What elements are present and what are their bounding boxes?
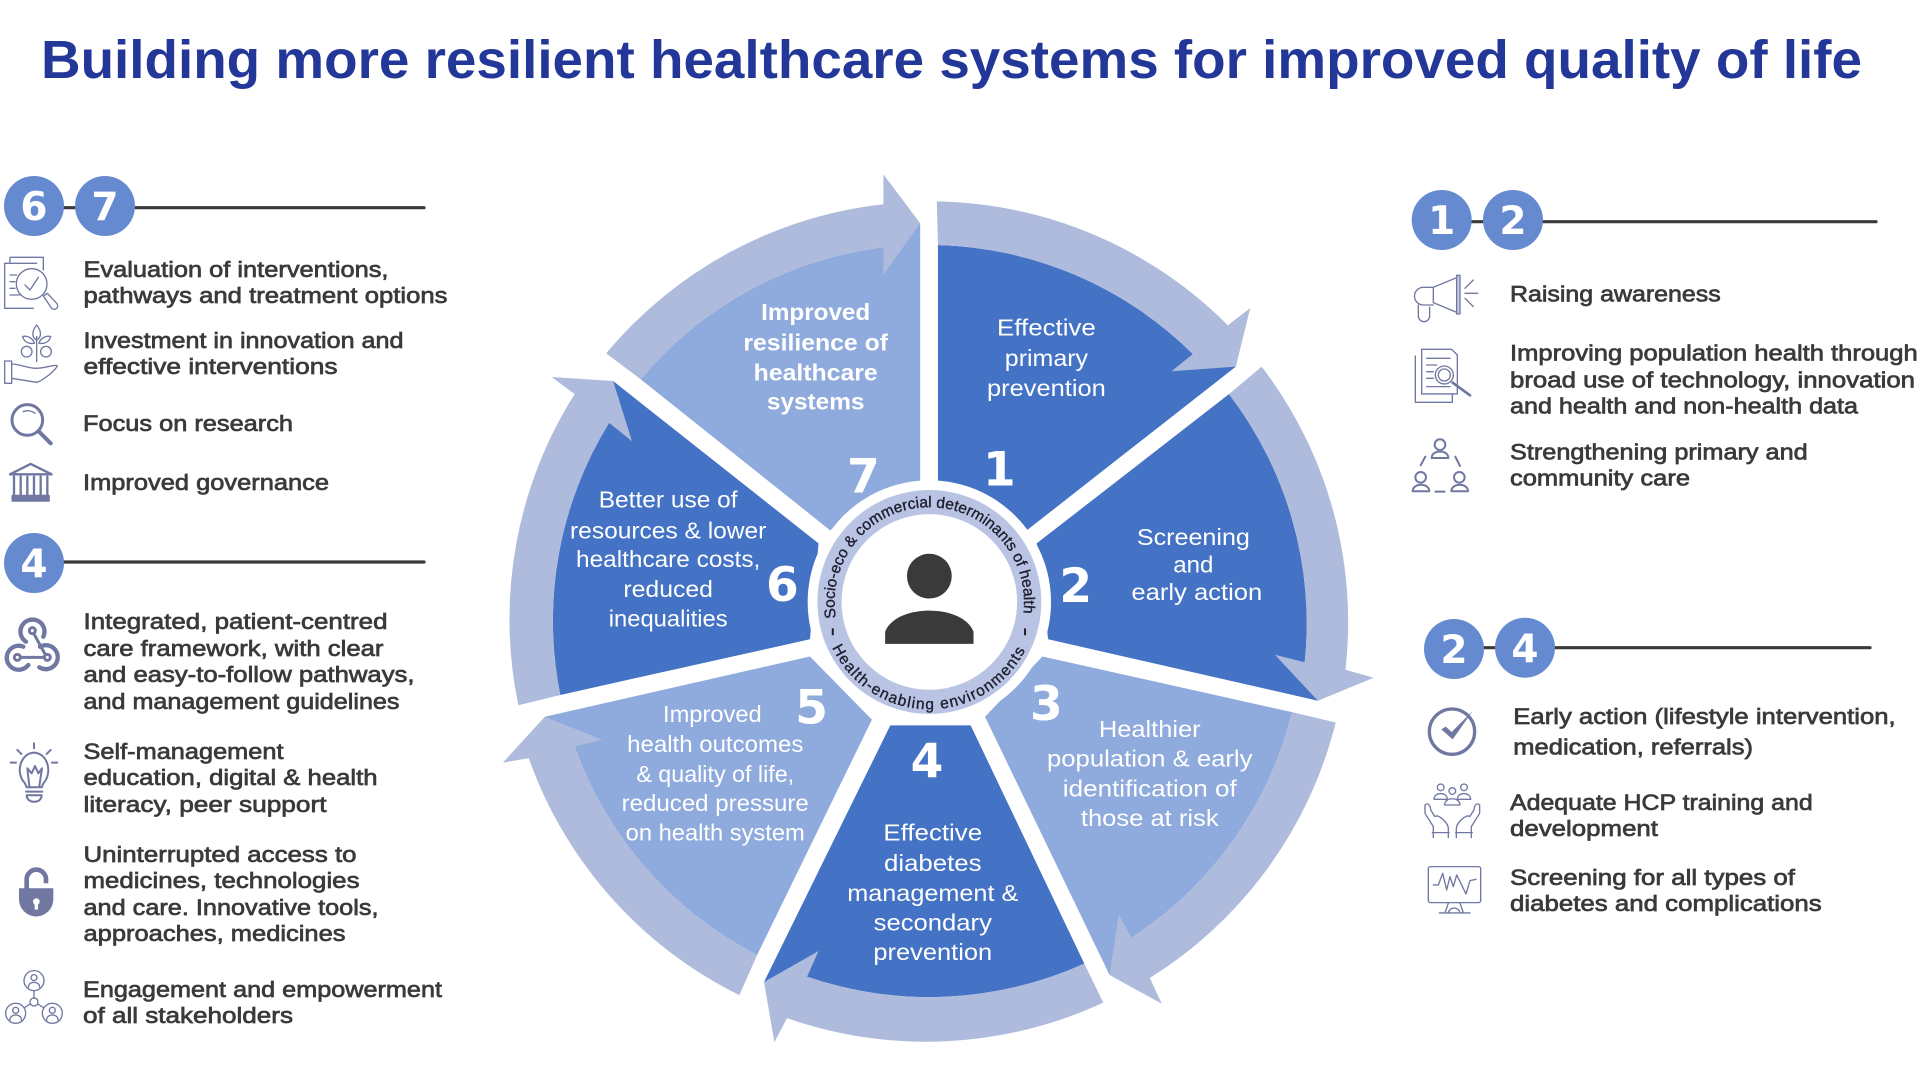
text: self-management: Self-management: [84, 739, 284, 764]
icon: document data: [1415, 349, 1470, 402]
text: uninterrupted access: approaches, medicines: [84, 921, 346, 946]
label 4: management &: [847, 880, 1019, 906]
text: improving population health: [1510, 341, 1918, 418]
label 7: resilience of: [743, 330, 888, 356]
header badges 1 2: [1412, 190, 1876, 250]
text: integrated care: and easy-to-follow pathways,: [84, 662, 414, 687]
icon: community group: [1413, 439, 1468, 492]
segment numbers: 1: [983, 442, 1016, 497]
label 7: Improved: [761, 299, 870, 325]
header badge 4: 4: [20, 542, 48, 587]
label 4: [847, 820, 1019, 965]
label 5: reduced pressure: [622, 790, 809, 816]
text: research: Focus on research: [83, 411, 293, 436]
text: hcp training: Adequate HCP training and: [1510, 790, 1813, 815]
label 3: identification of: [1063, 776, 1237, 802]
text: investment: [84, 328, 404, 379]
icon: open padlock: [19, 870, 53, 916]
header badges 6 7: 7: [91, 185, 119, 230]
text: improving population health: broad use of technology, innovation: [1510, 368, 1915, 393]
segment numbers: 7: [847, 449, 880, 504]
text: investment: Investment in innovation and: [84, 328, 404, 353]
text: uninterrupted access: medicines, technologies: [84, 868, 360, 893]
header badges 1 2: 1: [1428, 199, 1455, 244]
header badges 2 4: 4: [1511, 627, 1539, 672]
segment 5: improved health outcomes: [503, 656, 872, 995]
text: screening for diabetes: diabetes and complications: [1510, 891, 1822, 916]
label 6: healthcare costs,: [576, 546, 760, 572]
text: raising awareness: Raising awareness: [1510, 282, 1721, 307]
label 7: [743, 299, 888, 415]
text: hcp training: development: [1510, 816, 1659, 841]
segment 1: effective primary prevention: [937, 201, 1250, 530]
panel: steps 2 and 4: [1424, 618, 1896, 916]
segment numbers: 5: [795, 681, 828, 736]
segment numbers: 3: [1030, 677, 1063, 732]
text: screening for diabetes: [1510, 865, 1822, 916]
label 3: [1047, 716, 1253, 831]
text: strengthening primary care: [1510, 439, 1808, 491]
hub text: determinants: Socio-eco & commercial determinants of health: [824, 496, 1036, 618]
label 1: Effective: [997, 315, 1096, 341]
hub text: environments: Health-enabling environments: [832, 644, 1024, 713]
label 3: those at risk: [1081, 805, 1219, 831]
icon: investment plant in hand: [5, 325, 57, 383]
text: governance: Improved governance: [83, 470, 329, 495]
icon: megaphone: [1414, 275, 1478, 322]
label 7: systems: [767, 389, 864, 415]
segment 4: effective diabetes management: [764, 725, 1103, 1042]
panel: cycle wheel: [503, 174, 1374, 1042]
icon: light bulb: [11, 743, 57, 802]
segment 7: improved resilience: [606, 174, 920, 530]
hub dash left: [832, 628, 834, 635]
text: uninterrupted access: Uninterrupted access to: [84, 842, 356, 867]
panel: steps 1 and 2: [1412, 190, 1918, 492]
label 5: health outcomes: [627, 731, 803, 757]
text: improving population health: and health and non-health data: [1510, 393, 1859, 418]
segment 3: healthier population: [985, 656, 1336, 1004]
panel: steps 6 and 7: [4, 176, 448, 501]
label 2: early action: [1131, 579, 1262, 605]
segment numbers: 6: [766, 558, 799, 613]
segment numbers: 2: [1059, 559, 1092, 614]
label 1: prevention: [987, 375, 1106, 401]
header badges 6 7: 6: [20, 185, 48, 230]
header badges 2 4: 2: [1440, 628, 1468, 673]
hub dash right: [1024, 628, 1026, 635]
text: self-management: education, digital & health: [84, 765, 378, 790]
panel: step 4: [4, 533, 443, 1028]
text: integrated care: care framework, with clear: [84, 636, 384, 661]
text: early action: [1513, 704, 1896, 759]
label 4: Effective: [883, 820, 982, 846]
text: screening for diabetes: Screening for all types of: [1510, 865, 1796, 890]
segment 6: better use of resources: [509, 377, 819, 705]
text: early action: medication, referrals): [1513, 734, 1753, 759]
text: evaluation: [84, 257, 448, 308]
label 5: Improved: [663, 701, 762, 727]
text: uninterrupted access: and care. Innovative tools,: [84, 895, 378, 920]
icon: integrated network: [7, 620, 58, 670]
text: self-management: literacy, peer support: [84, 792, 327, 817]
text: integrated care: [84, 609, 414, 714]
icon: monitor with ecg: [1428, 867, 1481, 913]
segment numbers: 4: [911, 735, 943, 790]
label 6: Better use of: [599, 486, 738, 512]
text: integrated care: Integrated, patient-centred: [84, 609, 388, 634]
segment numbers: [766, 442, 1092, 790]
icon: government building: [10, 464, 52, 501]
icon: magnifier: [12, 405, 51, 443]
text: investment: effective interventions: [84, 354, 338, 379]
text: hcp training: [1510, 790, 1813, 841]
text: strengthening primary care: Strengthening primary and: [1510, 439, 1808, 464]
icon: clock with check: [1429, 709, 1475, 754]
text: integrated care: and management guidelines: [84, 689, 400, 714]
header badges 6 7: [4, 176, 424, 236]
text: improving population health: Improving population health through: [1510, 341, 1918, 366]
icon: hands holding team: [1425, 784, 1480, 838]
icon: stakeholders network: [6, 971, 62, 1023]
header badges 2 4: [1424, 618, 1870, 679]
label 2: and: [1173, 552, 1213, 578]
segment 2: screening and early action: [1037, 367, 1374, 701]
text: engagement: of all stakeholders: [83, 1003, 293, 1028]
text: uninterrupted access: [84, 842, 378, 946]
text: engagement: Engagement and empowerment: [83, 977, 443, 1002]
label 6: [570, 486, 766, 632]
text: engagement: [83, 977, 443, 1028]
icon: person: [885, 554, 974, 644]
header badges 1 2: 2: [1499, 199, 1527, 244]
text: strengthening primary care: community care: [1510, 466, 1690, 491]
label 1: [987, 315, 1106, 401]
label 5: & quality of life,: [636, 761, 794, 787]
label 2: [1131, 524, 1262, 605]
label 4: diabetes: [884, 850, 982, 876]
label 7: healthcare: [754, 359, 878, 385]
label 1: primary: [1005, 345, 1088, 371]
label 4: secondary: [874, 909, 992, 935]
label 5: on health system: [626, 820, 805, 846]
label 4: prevention: [873, 939, 992, 965]
icon: document evaluation: [5, 257, 58, 309]
label 6: inequalities: [609, 606, 728, 632]
text: evaluation: Evaluation of interventions,: [84, 257, 388, 282]
central hub: [808, 480, 1051, 714]
label 6: resources & lower: [570, 517, 766, 543]
label 3: population & early: [1047, 746, 1253, 772]
header badge 4: [4, 533, 424, 593]
label 2: Screening: [1137, 524, 1250, 550]
text: evaluation: pathways and treatment options: [84, 283, 448, 308]
title: Building more resilient healthcare systems for improved quality of life: [41, 30, 1862, 90]
label 3: Healthier: [1099, 716, 1201, 742]
text: self-management: [84, 739, 378, 817]
label 6: reduced: [623, 576, 713, 602]
label 5: [622, 701, 809, 846]
text: early action: Early action (lifestyle intervention,: [1513, 704, 1896, 729]
